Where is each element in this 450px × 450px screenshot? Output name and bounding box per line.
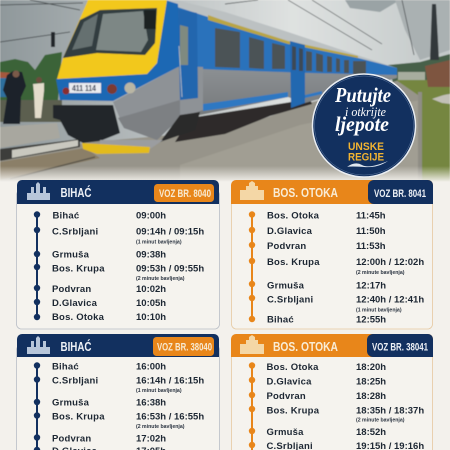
panel: Bihać 38040 bbox=[16, 334, 220, 450]
panel header: VOZ BR. 8040 bbox=[159, 188, 211, 200]
number plate: 411 114 bbox=[72, 84, 96, 93]
headlights bbox=[107, 84, 117, 94]
yellow stripe bbox=[208, 15, 358, 58]
timetable rows: Podvran bbox=[266, 391, 306, 402]
cab undercarriage bbox=[53, 105, 120, 143]
timetable rows: D.Glavica bbox=[52, 298, 98, 309]
timetable rows: 12:40h / 12:41h bbox=[356, 294, 424, 306]
timetable rows: C.Srbljani bbox=[52, 376, 98, 386]
wires bbox=[0, 0, 414, 55]
windshield bbox=[63, 8, 157, 58]
people on platform bbox=[3, 71, 26, 124]
panel header bbox=[231, 334, 433, 357]
route line bbox=[249, 211, 255, 322]
timetable rows: 09:14h / 09:15h bbox=[136, 226, 204, 238]
coach door bbox=[290, 41, 305, 108]
cab yellow bbox=[57, 0, 167, 79]
coach grey side bbox=[178, 66, 397, 118]
plow bbox=[100, 140, 163, 149]
badge: Putujte i otkrijte ljepote: UNSKE bbox=[348, 141, 384, 153]
timetable rows: Grmuša bbox=[267, 280, 305, 292]
timetable rows: Bos. Krupa bbox=[267, 257, 320, 268]
timetable rows: (2 minute bavljenja) bbox=[356, 270, 405, 276]
timetable rows: 12:17h bbox=[356, 280, 386, 292]
fade to page bbox=[0, 166, 450, 182]
badge: Putujte i otkrijte ljepote: ljepote bbox=[335, 112, 389, 136]
timetable rows: Grmuša bbox=[52, 398, 90, 408]
side windows bbox=[215, 28, 366, 74]
panel header: VOZ BR. 38041 bbox=[372, 342, 428, 354]
route line bbox=[249, 362, 255, 450]
timetable rows: Bos. Krupa bbox=[52, 264, 105, 274]
grass bbox=[396, 80, 450, 182]
timetable rows: 18:52h bbox=[356, 427, 386, 438]
panel header bbox=[17, 180, 219, 204]
timetable rows bbox=[52, 210, 204, 323]
timetable rows: (1 minut bavljenja) bbox=[136, 240, 182, 246]
timetable rows: Podvran bbox=[52, 284, 91, 295]
blue window band bbox=[168, 4, 397, 75]
route line bbox=[34, 362, 40, 450]
trees on the left bbox=[0, 52, 62, 100]
timetable rows: 10:02h bbox=[136, 284, 166, 295]
cab blue bbox=[56, 0, 180, 101]
route line bbox=[34, 211, 40, 320]
timetable rows: 11:45h bbox=[356, 210, 386, 222]
timetable rows: Grmuša bbox=[52, 250, 90, 260]
panel header: BIHAĆ bbox=[60, 185, 92, 200]
rail bbox=[418, 92, 422, 180]
timetable rows: D.Glavica bbox=[267, 226, 313, 237]
timetable rows: Podvran bbox=[52, 434, 91, 444]
timetable rows: Bihać bbox=[267, 314, 294, 326]
timetable rows: C.Srbljani bbox=[267, 294, 313, 306]
timetable rows: 10:10h bbox=[136, 312, 166, 323]
panel: Bihać 8040 bbox=[16, 180, 220, 329]
timetable rows: Bos. Otoka bbox=[267, 210, 320, 222]
timetable rows: Podvran bbox=[267, 241, 306, 252]
timetable rows: 16:38h bbox=[136, 398, 166, 408]
timetable rows: 12:00h / 12:02h bbox=[356, 257, 424, 268]
timetable rows: 17:02h bbox=[136, 434, 166, 444]
timetable rows: 11:50h bbox=[356, 226, 386, 237]
timetable rows: 09:00h bbox=[136, 210, 166, 222]
hills and village bbox=[388, 54, 450, 90]
timetable rows: (2 minute bavljenja) bbox=[136, 424, 185, 430]
wave logo bbox=[347, 161, 388, 167]
timetable rows: (2 minute bavljenja) bbox=[136, 276, 185, 282]
timetable rows: Bos. Otoka bbox=[266, 362, 319, 373]
cab front grey skirt bbox=[113, 66, 203, 140]
timetable rows: 18:20h bbox=[356, 362, 386, 373]
panel header: BOS. OTOKA bbox=[273, 185, 338, 200]
timetable rows: C.Srbljani bbox=[52, 226, 98, 238]
timetable rows: 09:38h bbox=[136, 250, 166, 260]
timetable rows: D.Glavica bbox=[266, 376, 312, 388]
timetable rows: Bihać bbox=[52, 210, 79, 222]
timetable rows: Bos. Krupa bbox=[266, 406, 320, 416]
platform bbox=[0, 123, 60, 148]
badge: Putujte i otkrijte ljepote: i otkrijte bbox=[345, 104, 386, 119]
panel: Bos. Otoka 8041 bbox=[231, 180, 433, 329]
railway photo with train bbox=[0, 0, 450, 182]
badge: Putujte i otkrijte ljepote: Putujte bbox=[334, 83, 391, 107]
panel header: BIHAĆ bbox=[60, 339, 92, 354]
timetable rows: (2 minute bavljenja) bbox=[356, 418, 405, 424]
timetable rows: Bos. Otoka bbox=[52, 312, 105, 323]
timetable rows: Bos. Krupa bbox=[52, 412, 105, 422]
timetable rows bbox=[266, 362, 424, 450]
panel header bbox=[231, 180, 433, 204]
timetable rows: 09:53h / 09:55h bbox=[136, 264, 204, 274]
timetable rows: 12:55h bbox=[356, 314, 386, 326]
timetable rows: 18:35h / 18:37h bbox=[356, 406, 424, 416]
timetable rows: 11:53h bbox=[356, 241, 386, 252]
panel header: VOZ BR. 8041 bbox=[374, 188, 426, 200]
timetable rows: Bihać bbox=[52, 362, 79, 372]
panel header: BOS. OTOKA bbox=[273, 339, 338, 354]
timetable rows: 16:00h bbox=[136, 362, 166, 372]
timetable rows: (1 minut bavljenja) bbox=[136, 388, 182, 394]
roof bbox=[170, 0, 397, 74]
panel header bbox=[17, 334, 219, 357]
panel: Bos. Otoka 38041 bbox=[231, 334, 433, 450]
badge: Putujte i otkrijte ljepote bbox=[312, 74, 416, 177]
timetable rows: 16:14h / 16:15h bbox=[136, 376, 204, 386]
lower blue stripe bbox=[203, 92, 288, 111]
gravel ground bbox=[0, 80, 420, 182]
timetable rows: Grmuša bbox=[266, 427, 304, 438]
timetable rows: 18:25h bbox=[356, 376, 386, 388]
timetable rows: 18:28h bbox=[356, 391, 386, 402]
undercarriage of coach bbox=[175, 99, 312, 142]
timetable rows: 16:53h / 16:55h bbox=[136, 412, 204, 422]
cab door bbox=[178, 9, 198, 100]
timetable rows bbox=[52, 362, 204, 450]
timetable rows: 10:05h bbox=[136, 298, 166, 309]
timetable rows bbox=[267, 210, 424, 326]
pylon and building bbox=[430, 4, 439, 60]
timetable rows: (1 minut bavljenja) bbox=[356, 308, 402, 314]
panel header: VOZ BR. 38040 bbox=[157, 342, 212, 354]
badge: Putujte i otkrijte ljepote: REGIJE bbox=[348, 152, 384, 164]
